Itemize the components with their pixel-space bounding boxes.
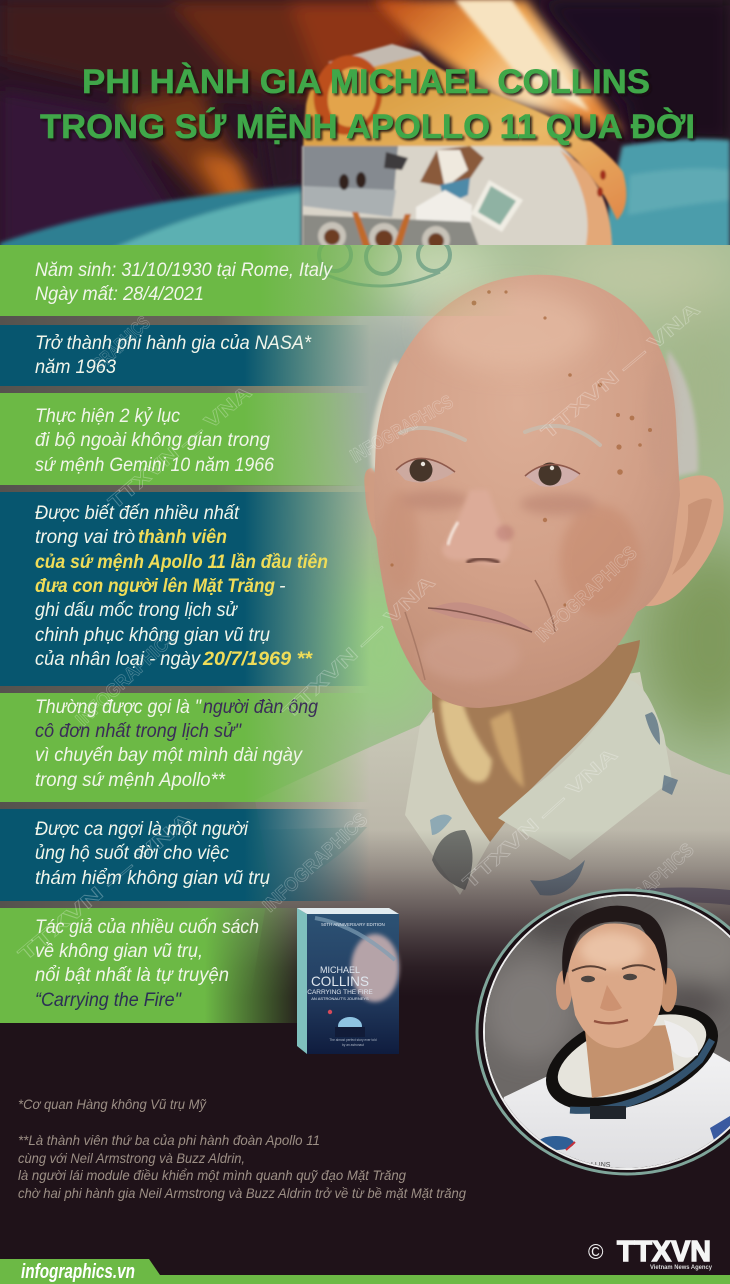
footnotes: **Là thành viên thứ ba của phi hành đoàn Apollo 11: [18, 1132, 320, 1148]
shoulder fold: [250, 827, 367, 905]
watermarks: TTXVN — VNA: [459, 744, 622, 894]
bottom fade into dark background: [0, 830, 730, 1002]
left ear: [364, 468, 392, 545]
info band 7: author of Carrying the Fire: nổi bật nhất là tự truyện: [35, 964, 229, 986]
info band 4: Apollo 11 mission: [0, 492, 370, 693]
right ear: [640, 475, 724, 606]
face: [568, 923, 663, 1048]
facial features: [572, 965, 655, 1023]
book cover: Carrying the Fire: [297, 908, 399, 1054]
watermarks: GRAPHICS: [89, 313, 155, 376]
info band 3: Gemini 10 records: đi bộ ngoài không gian trong: [35, 429, 270, 451]
info band 4: Apollo 11 mission: Được biết đến nhiều nhất: [35, 502, 240, 524]
footnotes: chờ hai phi hành gia Neil Armstrong và Buzz Aldrin trở về từ bề mặt Mặt trăng: [18, 1185, 466, 1201]
info band 4: Apollo 11 mission: đưa con người lên Mặt Trăng: [35, 575, 275, 597]
watermarks: INFOGRAPHICS: [589, 840, 698, 944]
footer strip with website tab: [0, 1259, 730, 1284]
suit patches: LLINS: [591, 1162, 611, 1169]
title: TRONG SỨ MỆNH APOLLO 11 QUA ĐỜI: [40, 108, 695, 146]
info band 6: advocate for space exploration: ủng hộ suốt đời cho việc: [35, 842, 229, 864]
suit collar ring: [546, 1005, 718, 1108]
info band 6: advocate for space exploration: Được ca ngợi là một người: [35, 818, 249, 840]
suit patches: [538, 1116, 730, 1169]
TTXVN logo: ©: [588, 1241, 604, 1264]
book cover: Carrying the Fire: 50TH ANNIVERSARY EDITION: [321, 922, 385, 927]
shirt collar: [405, 712, 490, 895]
circular photo of young Michael Collins in spacesuit: [477, 890, 730, 1180]
info band 3: Gemini 10 records: [0, 393, 370, 492]
info band 7: author of Carrying the Fire: Tác giả của nhiều cuốn sách: [35, 916, 259, 938]
neck: [585, 1025, 674, 1098]
watermarks: TTXVN — VNA: [538, 299, 705, 444]
info band 4: Apollo 11 mission: trong vai trò: [35, 526, 135, 548]
info band 7: author of Carrying the Fire: về không gian vũ trụ,: [35, 940, 203, 962]
info band 4: Apollo 11 mission: thành viên: [138, 526, 227, 548]
info band 4: Apollo 11 mission: ghi dấu mốc trong lịch sử: [35, 599, 239, 621]
space suit: [504, 1052, 730, 1168]
info band 6: advocate for space exploration: thám hiểm không gian vũ trụ: [35, 867, 270, 889]
footnotes: là người lái module điều khiển một mình quanh quỹ đạo Mặt Trăng: [18, 1167, 406, 1183]
footer strip with website tab: infographics.vn: [21, 1261, 135, 1283]
eyebrows: [400, 426, 600, 445]
info band 4: Apollo 11 mission: 20/7/1969 **: [202, 648, 313, 670]
TTXVN logo: [588, 1236, 712, 1271]
portrait backdrop: blurred green foliage: [214, 245, 730, 972]
book cover: Carrying the Fire: MICHAEL: [320, 965, 360, 975]
info band 1: birth and death dates: Ngày mất: 28/4/2021: [35, 283, 204, 305]
book cover: Carrying the Fire: The almost perfect story ever told: [329, 1038, 377, 1042]
info band 5: loneliest man in history: cô đơn nhất trong lịch sử": [35, 720, 242, 742]
watermarks: INFOGRAPHICS: [72, 627, 181, 731]
shirt leaf pattern: [430, 712, 730, 905]
watermarks: TTXVN — VNA: [105, 382, 256, 514]
watermarks: INFOGRAPHICS: [347, 392, 457, 467]
book cover: Carrying the Fire: CARRYING THE FIRE: [307, 989, 373, 996]
info band 5: loneliest man in history: vì chuyến bay một mình dài ngày: [35, 744, 303, 766]
info band 4: Apollo 11 mission: chinh phục không gian vũ trụ: [35, 624, 270, 646]
TTXVN logo: Vietnam News Agency: [650, 1264, 712, 1271]
right eye: [525, 462, 580, 487]
info band 5: loneliest man in history: trong sứ mệnh Apollo**: [35, 769, 226, 791]
info band 1: birth and death dates: [0, 245, 520, 325]
book cover: Carrying the Fire: AN ASTRONAUT'S JOURNEYS: [311, 996, 369, 1001]
info band 4: Apollo 11 mission: -: [279, 575, 286, 597]
info band 2: NASA astronaut: năm 1963: [35, 356, 116, 378]
info band 7: author of Carrying the Fire: [0, 908, 310, 1023]
left eye: [396, 458, 455, 483]
info band 1: birth and death dates: Năm sinh: 31/10/1930 tại Rome, Italy: [35, 259, 333, 281]
background artwork: Apollo capsule illustration: [0, 0, 730, 254]
info band 5: loneliest man in history: người đàn ông: [203, 696, 318, 718]
info band 7: author of Carrying the Fire: “Carrying the Fire": [35, 989, 182, 1011]
side hair: [371, 350, 698, 500]
TTXVN logo: TTXVN: [617, 1236, 711, 1268]
info band 2: NASA astronaut: Trở thành phi hành gia của NASA*: [35, 332, 312, 354]
book cover: Carrying the Fire: by an astronaut: [342, 1043, 364, 1047]
main portrait of Michael Collins: [250, 275, 730, 1000]
watermarks: TTXVN — VNA: [15, 808, 197, 966]
hair: [562, 906, 667, 985]
watermarks: INFOGRAPHICS: [259, 809, 372, 917]
watermarks: TTXVN — VNA: [279, 572, 440, 724]
freckles: [390, 290, 652, 607]
head shape: [374, 275, 680, 708]
neck: [432, 640, 640, 842]
watermarks: [15, 299, 705, 966]
info band 4: Apollo 11 mission: của nhân loại - ngày: [35, 648, 201, 670]
book cover: Carrying the Fire: COLLINS: [311, 973, 369, 989]
info band 5: loneliest man in history: [0, 693, 370, 809]
info band 3: Gemini 10 records: sứ mệnh Gemini 10 năm 1966: [35, 454, 274, 476]
title: [40, 63, 695, 146]
shirt: [250, 672, 730, 1000]
info band 3: Gemini 10 records: Thực hiện 2 kỷ lục: [35, 405, 180, 427]
footnotes: cùng với Neil Armstrong và Buzz Aldrin,: [18, 1150, 245, 1166]
info band 2: NASA astronaut: [0, 325, 370, 393]
footnotes: [18, 1096, 466, 1201]
ears: [556, 970, 572, 1010]
info band 4: Apollo 11 mission: của sứ mệnh Apollo 11 lần đầu tiên: [35, 551, 328, 573]
cheek shading: [382, 360, 674, 681]
watermarks: INFOGRAPHICS: [532, 543, 641, 647]
info band 5: loneliest man in history: Thường được gọi là ": [35, 696, 202, 718]
reflected capsule rings: [319, 239, 450, 286]
mouth and wrinkles: [405, 580, 555, 680]
nose: [442, 490, 514, 565]
footnotes: *Cơ quan Hàng không Vũ trụ Mỹ: [18, 1096, 207, 1112]
forehead highlight: [425, 290, 595, 370]
info band 6: advocate for space exploration: [0, 809, 370, 908]
photo frame rings: [477, 890, 730, 1174]
title: PHI HÀNH GIA MICHAEL COLLINS: [82, 63, 650, 101]
